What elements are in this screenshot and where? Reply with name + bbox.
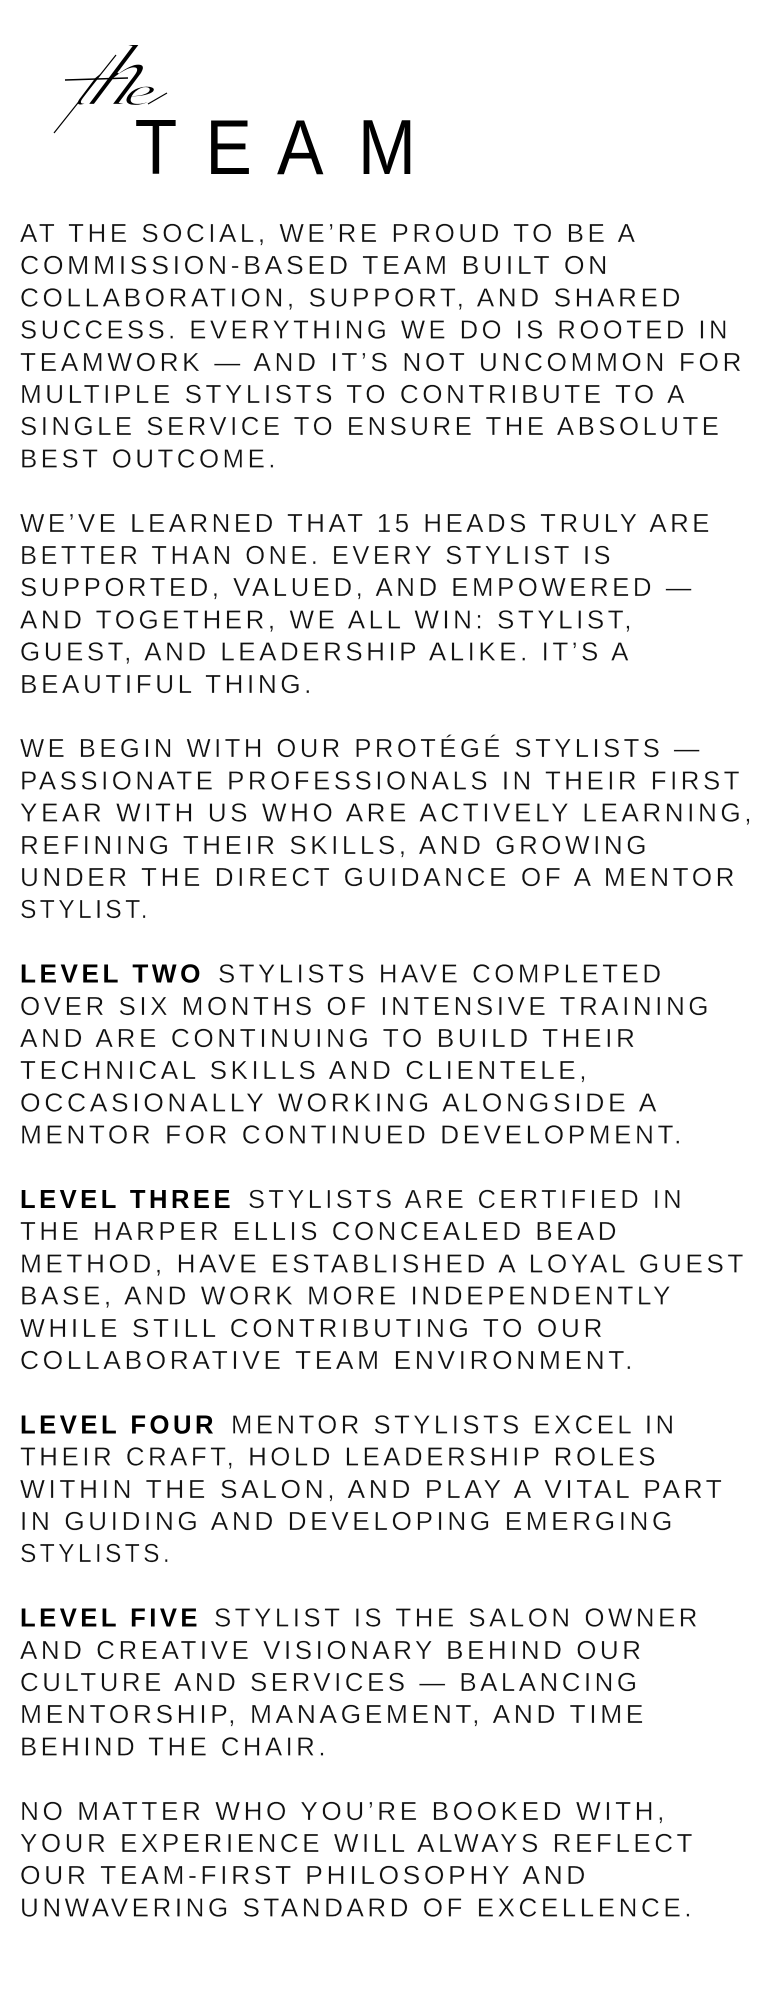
- closing paragraph: YOUR EXPERIENCE WILL ALWAYS REFLECT: [20, 1830, 696, 1858]
- level four paragraph: IN GUIDING AND DEVELOPING EMERGING: [20, 1508, 676, 1536]
- level three paragraph: METHOD, HAVE ESTABLISHED A LOYAL GUEST: [20, 1250, 747, 1278]
- intro paragraph: MULTIPLE STYLISTS TO CONTRIBUTE TO A: [20, 381, 688, 409]
- level four paragraph: THEIR CRAFT, HOLD LEADERSHIP ROLES: [20, 1444, 659, 1472]
- level four paragraph: STYLISTS.: [20, 1540, 173, 1568]
- script word: the: e: [120, 70, 162, 114]
- teamwork paragraph: WE’VE LEARNED THAT 15 HEADS TRULY ARE: [20, 510, 713, 538]
- level two paragraph: TECHNICAL SKILLS AND CLIENTELE,: [20, 1057, 590, 1085]
- protege paragraph: REFINING THEIR SKILLS, AND GROWING: [20, 832, 650, 860]
- title: [54, 26, 416, 191]
- level five paragraph: CULTURE AND SERVICES — BALANCING: [20, 1669, 640, 1697]
- intro paragraph: SUCCESS. EVERYTHING WE DO IS ROOTED IN: [20, 317, 731, 345]
- teamwork paragraph: SUPPORTED, VALUED, AND EMPOWERED —: [20, 574, 695, 602]
- level two paragraph: STYLISTS HAVE COMPLETED: [218, 961, 664, 989]
- protege paragraph: [20, 734, 755, 924]
- teamwork paragraph: GUEST, AND LEADERSHIP ALIKE. IT’S A: [20, 639, 632, 667]
- teamwork paragraph: BEAUTIFUL THING.: [20, 671, 315, 699]
- script word: the: t: [64, 52, 121, 119]
- level three paragraph: WHILE STILL CONTRIBUTING TO OUR: [20, 1315, 606, 1343]
- level five paragraph: [20, 1605, 701, 1761]
- teamwork paragraph: BETTER THAN ONE. EVERY STYLIST IS: [20, 542, 614, 570]
- closing paragraph: [20, 1798, 696, 1922]
- level five paragraph: LEVEL FIVE: [20, 1605, 201, 1633]
- level two paragraph: OVER SIX MONTHS OF INTENSIVE TRAINING: [20, 993, 712, 1021]
- level two paragraph: AND ARE CONTINUING TO BUILD THEIR: [20, 1025, 638, 1053]
- closing paragraph: UNWAVERING STANDARD OF EXCELLENCE.: [20, 1894, 695, 1922]
- script word: the: h: [73, 26, 173, 124]
- level three paragraph: COLLABORATIVE TEAM ENVIRONMENT.: [20, 1347, 636, 1375]
- intro paragraph: [20, 220, 745, 473]
- level two paragraph: MENTOR FOR CONTINUED DEVELOPMENT.: [20, 1122, 685, 1150]
- protege paragraph: STYLIST.: [20, 896, 151, 924]
- level two paragraph: [20, 961, 712, 1150]
- protege paragraph: PASSIONATE PROFESSIONALS IN THEIR FIRST: [20, 767, 743, 795]
- level five paragraph: MENTORSHIP, MANAGEMENT, AND TIME: [20, 1701, 647, 1729]
- level three paragraph: THE HARPER ELLIS CONCEALED BEAD: [20, 1218, 620, 1246]
- level three paragraph: STYLISTS ARE CERTIFIED IN: [248, 1186, 685, 1214]
- level four paragraph: [20, 1411, 726, 1568]
- teamwork paragraph: AND TOGETHER, WE ALL WIN: STYLIST,: [20, 606, 635, 634]
- closing paragraph: NO MATTER WHO YOU’RE BOOKED WITH,: [20, 1798, 668, 1826]
- teamwork paragraph: [20, 510, 713, 699]
- heading: TEAM: TEAM: [135, 104, 416, 191]
- intro paragraph: COMMISSION-BASED TEAM BUILT ON: [20, 252, 611, 280]
- level three paragraph: LEVEL THREE: [20, 1186, 234, 1214]
- protege paragraph: UNDER THE DIRECT GUIDANCE OF A MENTOR: [20, 864, 738, 892]
- intro paragraph: SINGLE SERVICE TO ENSURE THE ABSOLUTE: [20, 413, 723, 441]
- intro paragraph: AT THE SOCIAL, WE’RE PROUD TO BE A: [20, 220, 638, 248]
- closing paragraph: OUR TEAM-FIRST PHILOSOPHY AND: [20, 1862, 589, 1890]
- intro paragraph: COLLABORATION, SUPPORT, AND SHARED: [20, 284, 684, 312]
- protege paragraph: WE BEGIN WITH OUR PROTÉGÉ STYLISTS —: [20, 734, 703, 763]
- level three paragraph: [20, 1186, 747, 1375]
- level two paragraph: OCCASIONALLY WORKING ALONGSIDE A: [20, 1089, 660, 1117]
- intro paragraph: BEST OUTCOME.: [20, 445, 279, 473]
- level four paragraph: LEVEL FOUR: [20, 1411, 217, 1439]
- level five paragraph: AND CREATIVE VISIONARY BEHIND OUR: [20, 1637, 644, 1665]
- level five paragraph: BEHIND THE CHAIR.: [20, 1733, 329, 1761]
- protege paragraph: YEAR WITH US WHO ARE ACTIVELY LEARNING,: [20, 800, 755, 828]
- intro paragraph: TEAMWORK — AND IT’S NOT UNCOMMON FOR: [20, 349, 745, 377]
- level two paragraph: LEVEL TWO: [20, 961, 204, 989]
- level four paragraph: WITHIN THE SALON, AND PLAY A VITAL PART: [20, 1476, 726, 1504]
- level three paragraph: BASE, AND WORK MORE INDEPENDENTLY: [20, 1283, 674, 1311]
- level five paragraph: STYLIST IS THE SALON OWNER: [214, 1605, 701, 1633]
- level four paragraph: MENTOR STYLISTS EXCEL IN: [231, 1411, 678, 1439]
